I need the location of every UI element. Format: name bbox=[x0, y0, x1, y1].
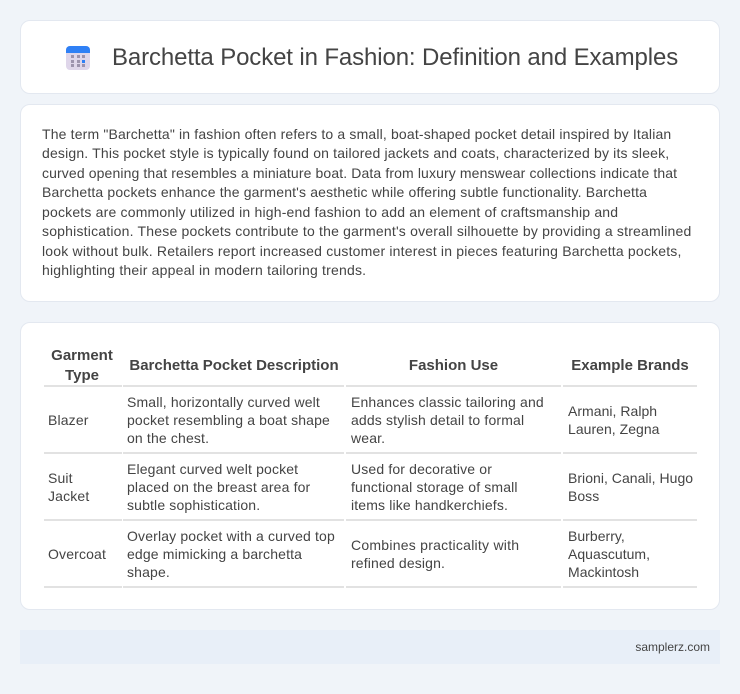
row: Overcoat: edge mimicking a barchetta bbox=[127, 546, 302, 562]
row: Blazer: adds stylish detail to formal bbox=[351, 412, 524, 428]
row: Blazer: pocket resembling a boat shape bbox=[127, 412, 330, 428]
table header: Garment bbox=[51, 347, 113, 364]
panel: definition paragraph: highlighting their appeal in modern tailoring trends. bbox=[42, 262, 366, 278]
row: Overcoat: Combines practicality with bbox=[351, 537, 519, 553]
panel: definition paragraph: sophistication. These pockets contribute to the garment's overall silhouette by providing a streamlined bbox=[42, 223, 691, 239]
row: Suit Jacket: Jacket bbox=[48, 488, 89, 504]
table header: Type bbox=[65, 367, 99, 384]
row: Overcoat: Overcoat bbox=[48, 546, 106, 562]
row: Blazer: Lauren, Zegna bbox=[568, 421, 659, 437]
row: Overcoat bbox=[48, 528, 650, 580]
footer text: samplerz.com bbox=[635, 640, 710, 654]
panel: definition paragraph: pockets are commonly utilized in high-end fashion to add an element of craftsmanship and bbox=[42, 204, 618, 220]
row: Suit Jacket: Brioni, Canali, Hugo bbox=[568, 470, 693, 486]
row: Blazer: on the chest. bbox=[127, 430, 209, 446]
row: Suit Jacket: Used for decorative or bbox=[351, 461, 492, 477]
row: Suit Jacket: Elegant curved welt pocket bbox=[127, 461, 298, 477]
row: Suit Jacket bbox=[48, 461, 693, 513]
panel: table bbox=[20, 322, 720, 610]
row: Suit Jacket: Suit bbox=[48, 470, 73, 486]
panel: definition paragraph: design. This pocket style is typically found on tailored jackets and coats, characterized by its sleek, bbox=[42, 145, 669, 161]
table header: Example Brands bbox=[571, 357, 689, 374]
table header bbox=[51, 347, 689, 384]
row: Blazer: Small, horizontally curved welt bbox=[127, 394, 320, 410]
table header: Barchetta Pocket Description bbox=[129, 357, 339, 374]
row: Overcoat: Overlay pocket with a curved top bbox=[127, 528, 335, 544]
row: Overcoat: Mackintosh bbox=[568, 564, 639, 580]
row: Suit Jacket: items like handkerchiefs. bbox=[351, 497, 508, 513]
row: Overcoat: Burberry, bbox=[568, 528, 625, 544]
row: Blazer: wear. bbox=[351, 430, 385, 446]
row: Suit Jacket: functional storage of small bbox=[351, 479, 518, 495]
title: Barchetta Pocket in Fashion: Definition and Examples bbox=[112, 44, 678, 71]
icon: calendar bbox=[66, 46, 90, 70]
row: Overcoat: shape. bbox=[127, 564, 170, 580]
row: Suit Jacket: subtle sophistication. bbox=[127, 497, 260, 513]
row: Overcoat: refined design. bbox=[351, 555, 445, 571]
panel: definition paragraph: The term "Barchetta" in fashion often refers to a small, boat-shaped pocket detail inspired by Italian bbox=[42, 126, 671, 142]
row: Blazer: Enhances classic tailoring and bbox=[351, 394, 544, 410]
panel: definition paragraph bbox=[20, 104, 720, 302]
panel: definition paragraph: curved opening that resembles a miniature boat. Data from luxury menswear collections indicate that bbox=[42, 165, 677, 181]
panel: definition paragraph: look without bulk. Retailers report increased customer interest in pieces featuring Barchetta pockets, bbox=[42, 243, 682, 259]
row: Blazer: Armani, Ralph bbox=[568, 403, 657, 419]
row: Blazer bbox=[48, 394, 660, 446]
panel: definition paragraph: Barchetta pockets enhance the garment's aesthetic while offering subtle functionality. Barchetta bbox=[42, 184, 647, 200]
footer bar bbox=[20, 630, 720, 664]
row: Blazer: Blazer bbox=[48, 412, 89, 428]
header panel bbox=[20, 20, 720, 94]
row: Suit Jacket: placed on the breast area for bbox=[127, 479, 310, 495]
row: Overcoat: Aquascutum, bbox=[568, 546, 650, 562]
table header: Fashion Use bbox=[409, 357, 498, 374]
row: Suit Jacket: Boss bbox=[568, 488, 599, 504]
